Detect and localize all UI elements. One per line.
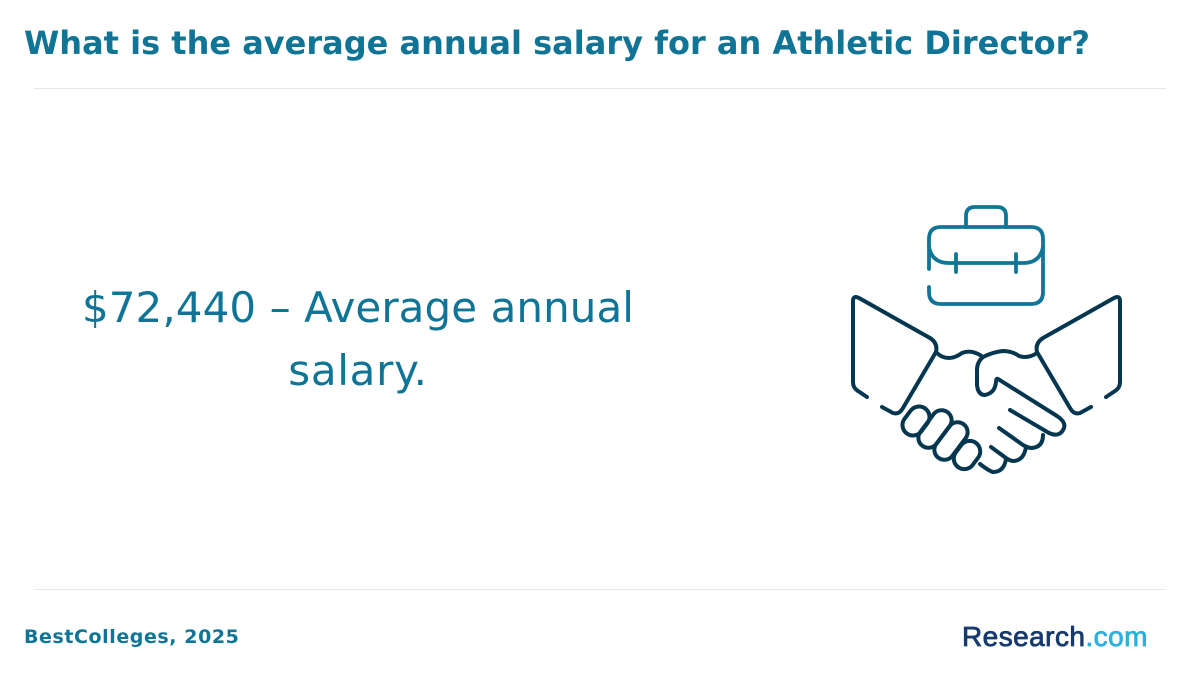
icon: briefcase — [929, 207, 1043, 304]
icon: handshake — [853, 297, 1120, 473]
main statistic text: $72,440 – Average annual — [82, 283, 634, 332]
source note: BestColleges, 2025 — [24, 626, 239, 648]
title: What is the average annual salary for an Athletic Director? — [24, 24, 1090, 62]
main statistic text — [82, 283, 634, 395]
icon: briefcase above handshake — [851, 205, 1122, 474]
logo: Research.com: Research.com — [962, 621, 1148, 652]
main statistic text: salary. — [288, 346, 428, 395]
